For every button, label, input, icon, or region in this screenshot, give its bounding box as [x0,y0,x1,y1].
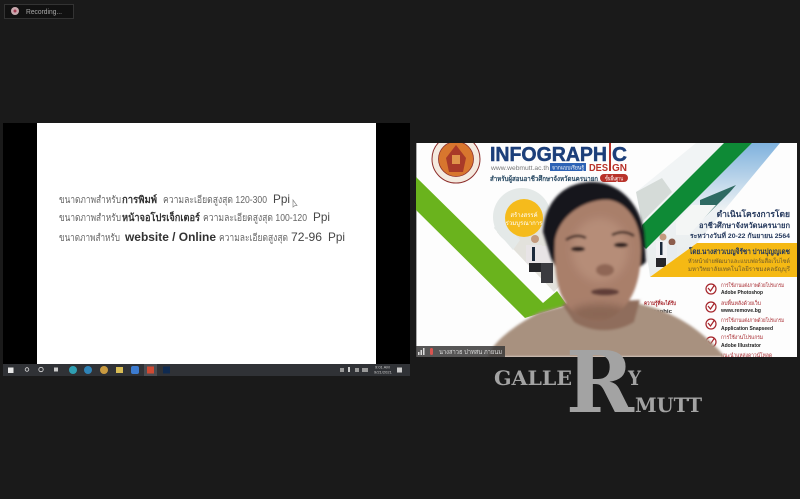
line: website resolution: website / Online [124,230,216,244]
line: projector resolution: ความละเอียดสูงสุด 100-120 [203,212,307,224]
presenter [488,182,725,357]
line: print resolution: ขนาดภาพสำหรับ [59,195,121,206]
line: print resolution: การพิมพ์ [122,194,157,206]
presenter hair [543,182,646,272]
line: projector resolution [59,210,330,224]
poster dark green diagonal band [640,143,752,249]
line: projector resolution: Ppi [313,210,330,224]
line: website resolution: ความละเอียดสูงสุด [219,232,288,244]
presenter eyes, brows, nose and mouth [566,232,634,296]
icon: start button [8,368,14,373]
line: print resolution: Ppi [273,192,290,206]
poster course checklist: graphic [650,309,672,315]
line: website resolution [59,230,345,244]
system tray [340,364,402,374]
icon: check marks [706,284,716,347]
poster course checklist: ลบพื้นหลังด้วยเว็บ [721,299,761,307]
watermark: Gallery RMUTT: MUTT [635,393,702,417]
poster course checklist: การใช้งานโปรแกรม [721,333,763,341]
presenter neck shadow [562,300,640,330]
line: projector resolution: ขนาดภาพสำหรับ [59,213,121,224]
line: website resolution: 72-96 [291,230,322,244]
line: website resolution: Ppi [328,230,345,244]
line: projector resolution: หน้าจอโปรเจ็กเตอร์ [122,210,201,224]
panel: presenter video with poster background [416,135,797,359]
poster title [490,143,628,184]
line: print resolution: ความละเอียดสูงสุด 120-300 [163,194,267,206]
watermark: Gallery RMUTT: R [566,333,635,433]
text block: image resolution by usage [59,192,345,244]
taskbar app icons [25,364,170,376]
poster project details: ดำเนินโครงการโดย [717,209,790,219]
poster course checklist: การใช้งานแต่งภาพด้วยโปรแกรม [721,316,784,324]
poster title: ขั้นพื้นฐาน [605,174,623,182]
poster title: สำหรับผู้สอนอาชีวศึกษาจังหวัดนครนายก [490,174,598,184]
recording indicator [4,4,74,18]
poster title: C [612,143,627,166]
icon: mouse cursor [293,200,297,207]
poster course checklist: Adobe Illustrator [721,343,762,349]
poster yellow circle badge: สร้างสรรค์ [510,211,538,219]
poster pale circle with students photo [493,188,677,292]
poster course checklist: การใช้งานแต่งภาพด้วยโปรแกรม [721,281,784,289]
presenter face [552,198,644,310]
poster green check stroke [416,177,567,318]
panel: shared slide screen [3,123,410,364]
poster title: DES [589,163,608,174]
poster yellow circle badge: ร่วมบูรณาการ [506,220,543,227]
line: website resolution: ขนาดภาพสำหรับ [59,233,120,244]
recording indicator: Recording... [26,7,62,16]
watermark: Gallery RMUTT: GALLE [494,366,572,390]
poster title: www.webmutt.ac.th [490,166,549,172]
taskbar [3,364,410,376]
poster course checklist [644,281,784,359]
poster course checklist: ความรู้ที่จะได้รับ [644,299,676,308]
watermark: Gallery RMUTT [494,333,702,433]
poster course checklist: Application Snapseed [721,326,773,332]
poster course checklist: Adobe Photoshop [721,290,764,296]
participant name bar: นางสาวธ ปาทสน ภายนม [439,349,502,356]
poster course checklist: www.remove.bg [720,308,761,314]
system tray: 9/21/2021 [374,370,393,374]
poster yellow speaker band [650,243,797,277]
poster title: INFOGRAPH [490,143,607,166]
slide page [37,123,376,364]
poster logo [432,143,480,184]
student figures [526,234,677,283]
poster yellow speaker band: มหาวิทยาลัยเทคโนโลยีราชมงคลธัญบุรี [688,265,791,273]
poster title: จากแบบเรียนรู้ [552,164,584,172]
poster project details [690,209,790,240]
poster project details: ระหว่างวันที่ 20-22 กันยายน 2564 [690,230,790,240]
poster project details: อาชีวศึกษาจังหวัดนครนายก [699,221,790,230]
poster title: GN [612,163,627,174]
presenter shirt [488,304,725,357]
watermark: Gallery RMUTT: Y [627,366,642,390]
poster yellow circle badge [505,199,543,237]
poster course checklist: แนะนำแหล่งดาวน์โหลด [721,351,772,359]
poster yellow speaker band: หัวหน้าฝ่ายพัฒนาและแบบฟอร์มสื่อเว็บไซต์ [688,256,790,265]
system tray: 9:01 AM [375,364,390,370]
participant name bar [416,346,505,357]
poster photo band: building and sky [636,143,780,277]
line: print resolution [59,192,290,206]
